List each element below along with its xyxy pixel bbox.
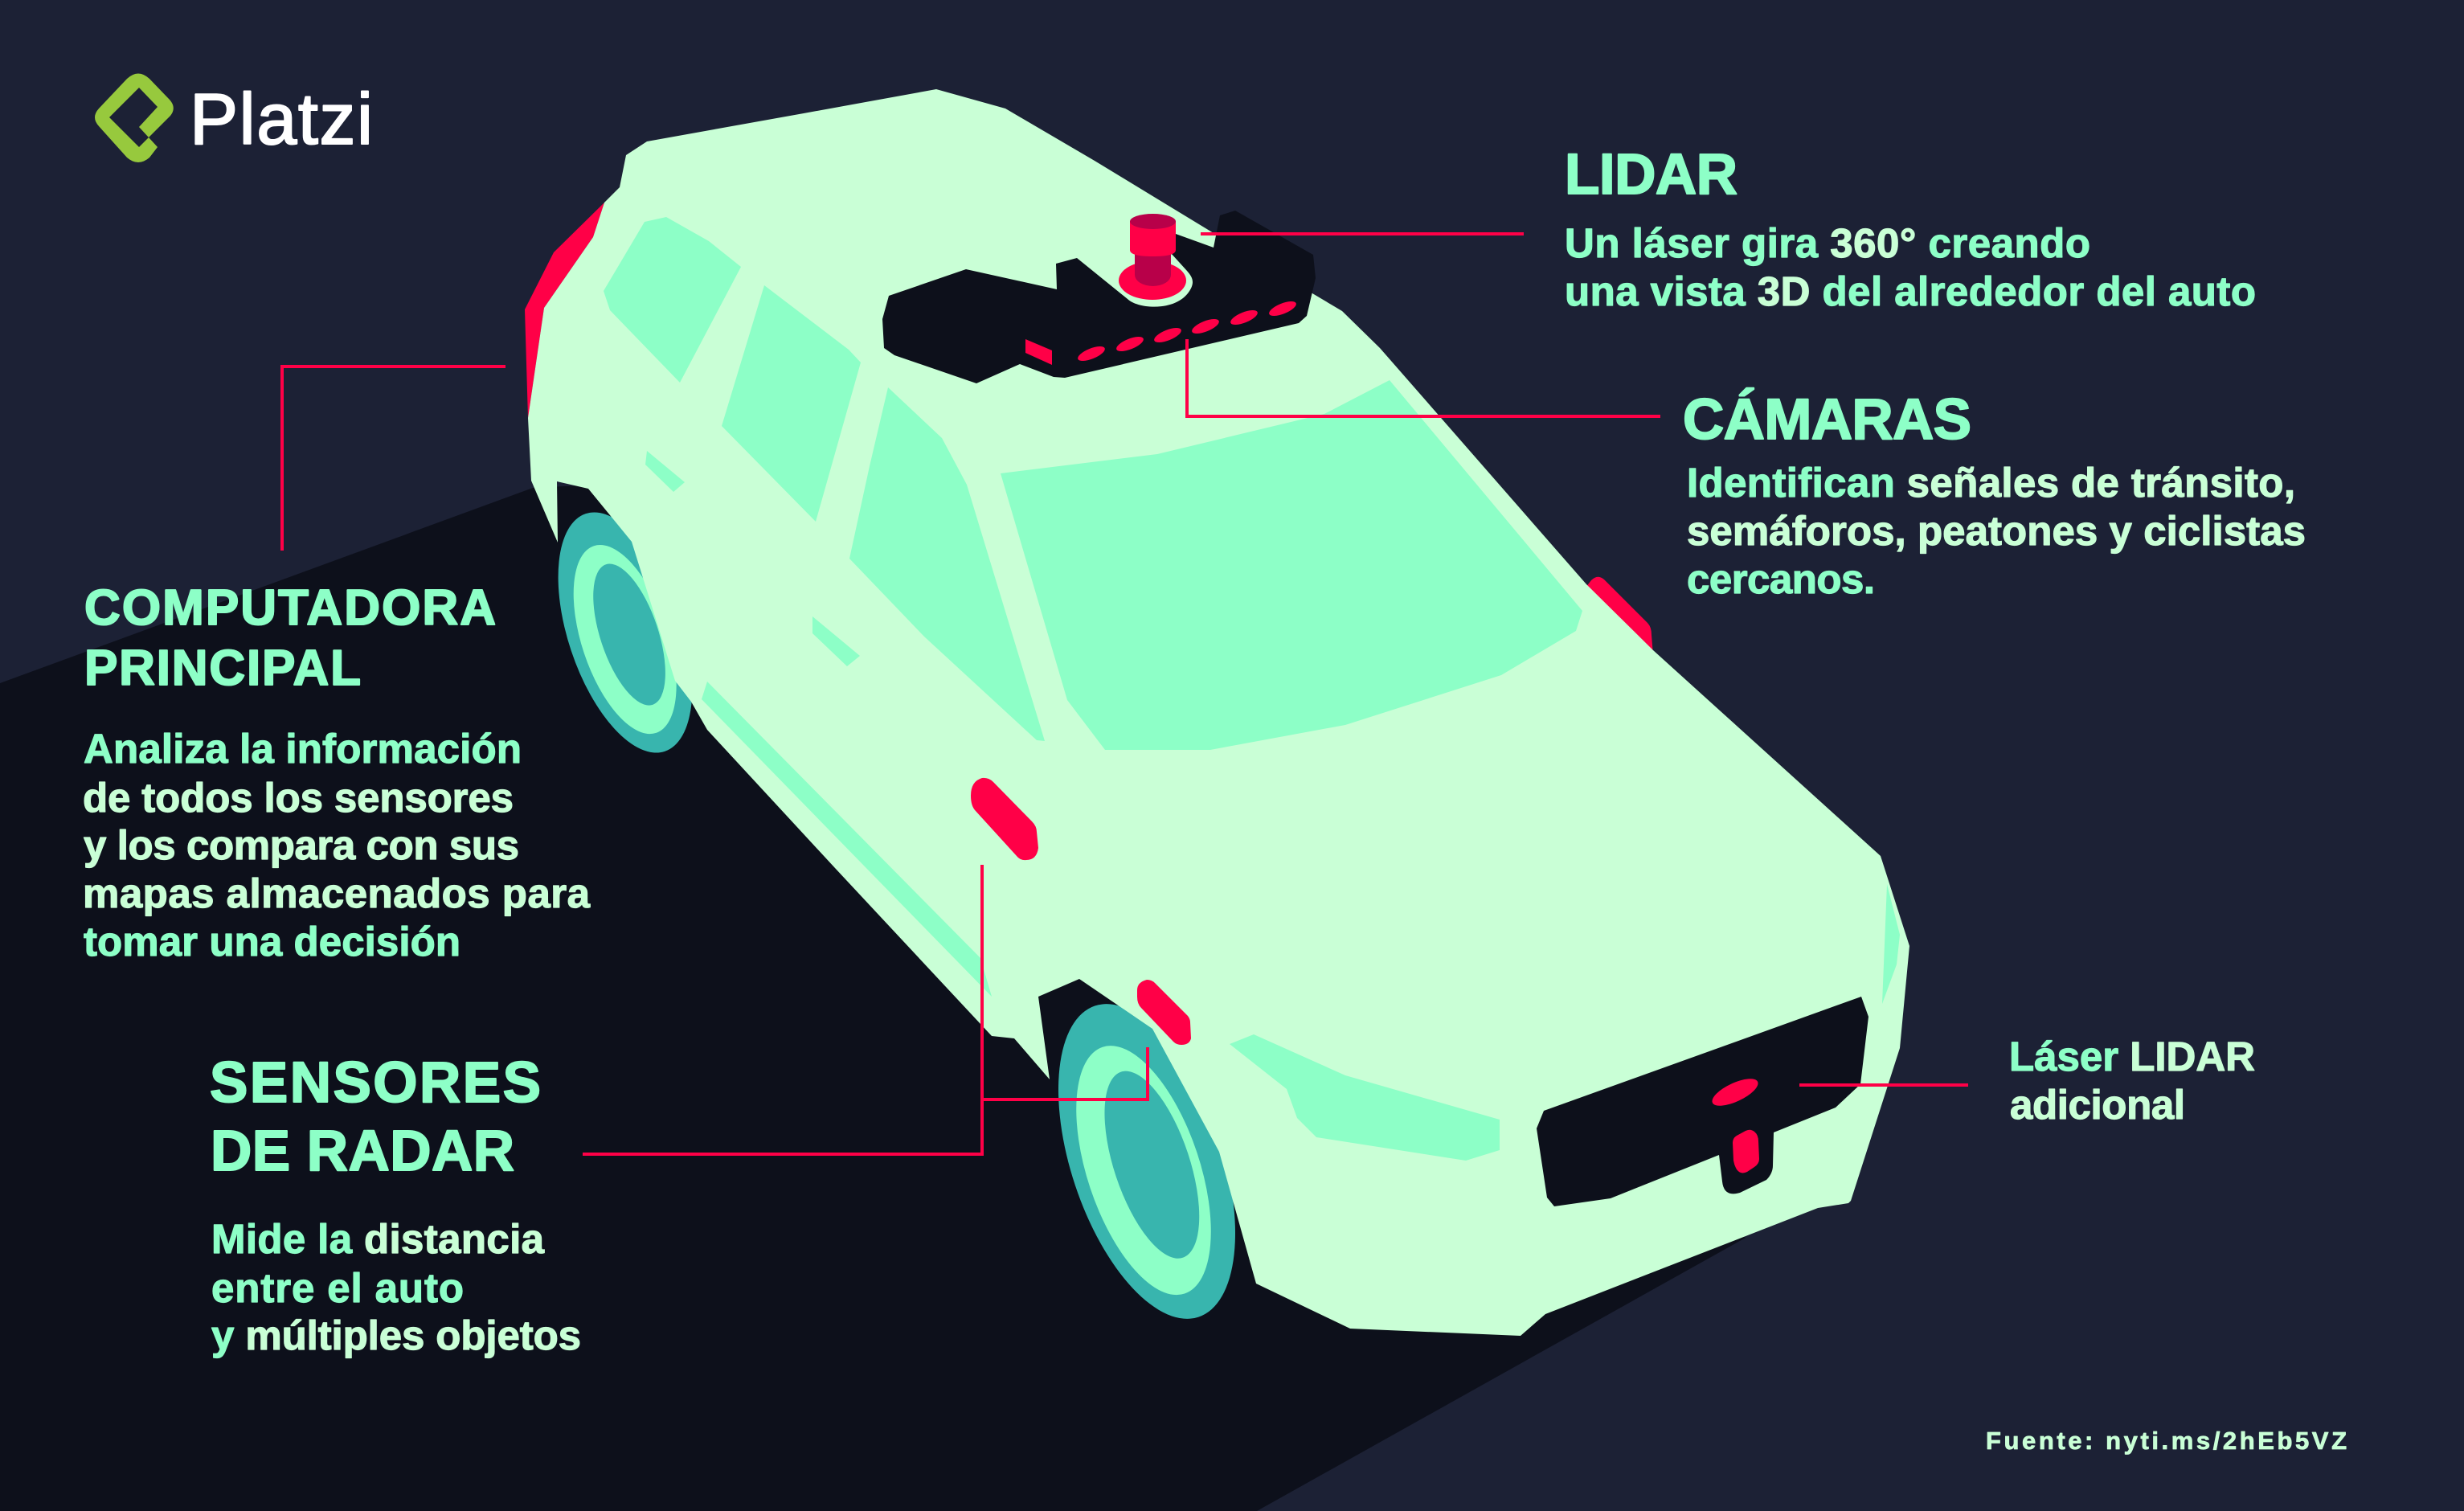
LIDAR unit bbox=[1119, 214, 1186, 300]
back door window bbox=[722, 285, 861, 522]
rear wheel bbox=[531, 496, 719, 769]
icon: Platzi diamond bbox=[95, 74, 174, 162]
leader line: cámaras bbox=[1187, 339, 1660, 416]
heading: computadora principal bbox=[84, 580, 496, 696]
front door handle bbox=[812, 616, 860, 666]
heading: sensores de radar bbox=[210, 1051, 541, 1183]
label: cámaras bbox=[1683, 388, 2306, 602]
front fender radar sensor bbox=[1137, 980, 1191, 1045]
front wheel bbox=[1023, 982, 1271, 1341]
right headlight sliver bbox=[1882, 884, 1900, 1004]
text: radar description bbox=[211, 1216, 581, 1358]
car shadow on the ground bbox=[0, 482, 1746, 1511]
text: computadora description: Analiza la información bbox=[84, 726, 522, 772]
front LIDAR lens bbox=[1709, 1073, 1762, 1112]
text: radar description: entre el auto bbox=[211, 1265, 464, 1311]
label: láser LIDAR adicional: adicional bbox=[2010, 1082, 2185, 1128]
side radar sensor bbox=[971, 778, 1038, 860]
logo: Platzi bbox=[95, 74, 373, 162]
label: LIDAR bbox=[1565, 143, 2256, 314]
label: láser LIDAR adicional: Láser LIDAR bbox=[2009, 1034, 2255, 1079]
red side mirror bbox=[1583, 577, 1653, 655]
windshield bbox=[1001, 380, 1582, 750]
text: computadora description: y los compara con sus bbox=[84, 822, 519, 868]
rack side sensor bbox=[1025, 339, 1052, 365]
rear window bbox=[604, 217, 741, 383]
headlight bbox=[1230, 1034, 1500, 1161]
heading: computadora principal: PRINCIPAL bbox=[84, 641, 361, 696]
car body bbox=[528, 89, 1909, 1336]
red rear light bbox=[525, 203, 604, 418]
logo wordmark: Platzi bbox=[190, 80, 373, 160]
heading: computadora principal: COMPUTADORA bbox=[84, 580, 496, 636]
car illustration bbox=[525, 89, 1909, 1341]
text: computadora description: de todos los sensores bbox=[83, 775, 514, 821]
heading: sensores de radar: SENSORES bbox=[210, 1051, 541, 1115]
roof rack with sensors bbox=[882, 211, 1316, 383]
front bumper sensor bbox=[1733, 1130, 1759, 1173]
leader line: láser adicional bbox=[1799, 1083, 1968, 1087]
label: sensores de radar bbox=[210, 1051, 581, 1358]
rear door handle bbox=[645, 451, 685, 492]
leader line: radar bbox=[583, 865, 1148, 1154]
text: radar description: Mide la distancia bbox=[211, 1216, 545, 1262]
heading: cámaras: CÁMARAS bbox=[1683, 388, 1971, 452]
text: LIDAR description bbox=[1565, 220, 2256, 314]
text: computadora description: tomar una decisión bbox=[84, 919, 460, 964]
source note: Fuente: nyti.ms/2hEb5VZ bbox=[1986, 1427, 2347, 1455]
text: computadora description bbox=[83, 726, 591, 964]
text: radar description: y múltiples objetos bbox=[211, 1312, 581, 1358]
text: cámaras description: semáforos, peatones y ciclistas bbox=[1687, 508, 2306, 554]
label: láser LIDAR adicional bbox=[2009, 1034, 2255, 1128]
front door window bbox=[849, 387, 1045, 741]
front grille bbox=[1537, 997, 1868, 1206]
heading: sensores de radar: DE RADAR bbox=[211, 1120, 514, 1183]
leader line: LIDAR bbox=[1201, 232, 1524, 235]
text: cámaras description: cercanos. bbox=[1687, 556, 1875, 602]
leader line: computadora bbox=[282, 366, 505, 551]
text: computadora description: mapas almacenados para bbox=[83, 870, 591, 916]
text: LIDAR description: una vista 3D del alrededor del auto bbox=[1565, 268, 2256, 314]
text: cámaras description: Identifican señales de tránsito, bbox=[1687, 460, 2295, 506]
label: computadora principal bbox=[83, 580, 591, 964]
side skirt strip bbox=[702, 682, 992, 997]
heading: LIDAR: LIDAR bbox=[1565, 143, 1737, 207]
text: cámaras description bbox=[1687, 460, 2306, 602]
text: LIDAR description: Un láser gira 360° creando bbox=[1565, 220, 2090, 266]
camera dots bbox=[1076, 298, 1298, 364]
